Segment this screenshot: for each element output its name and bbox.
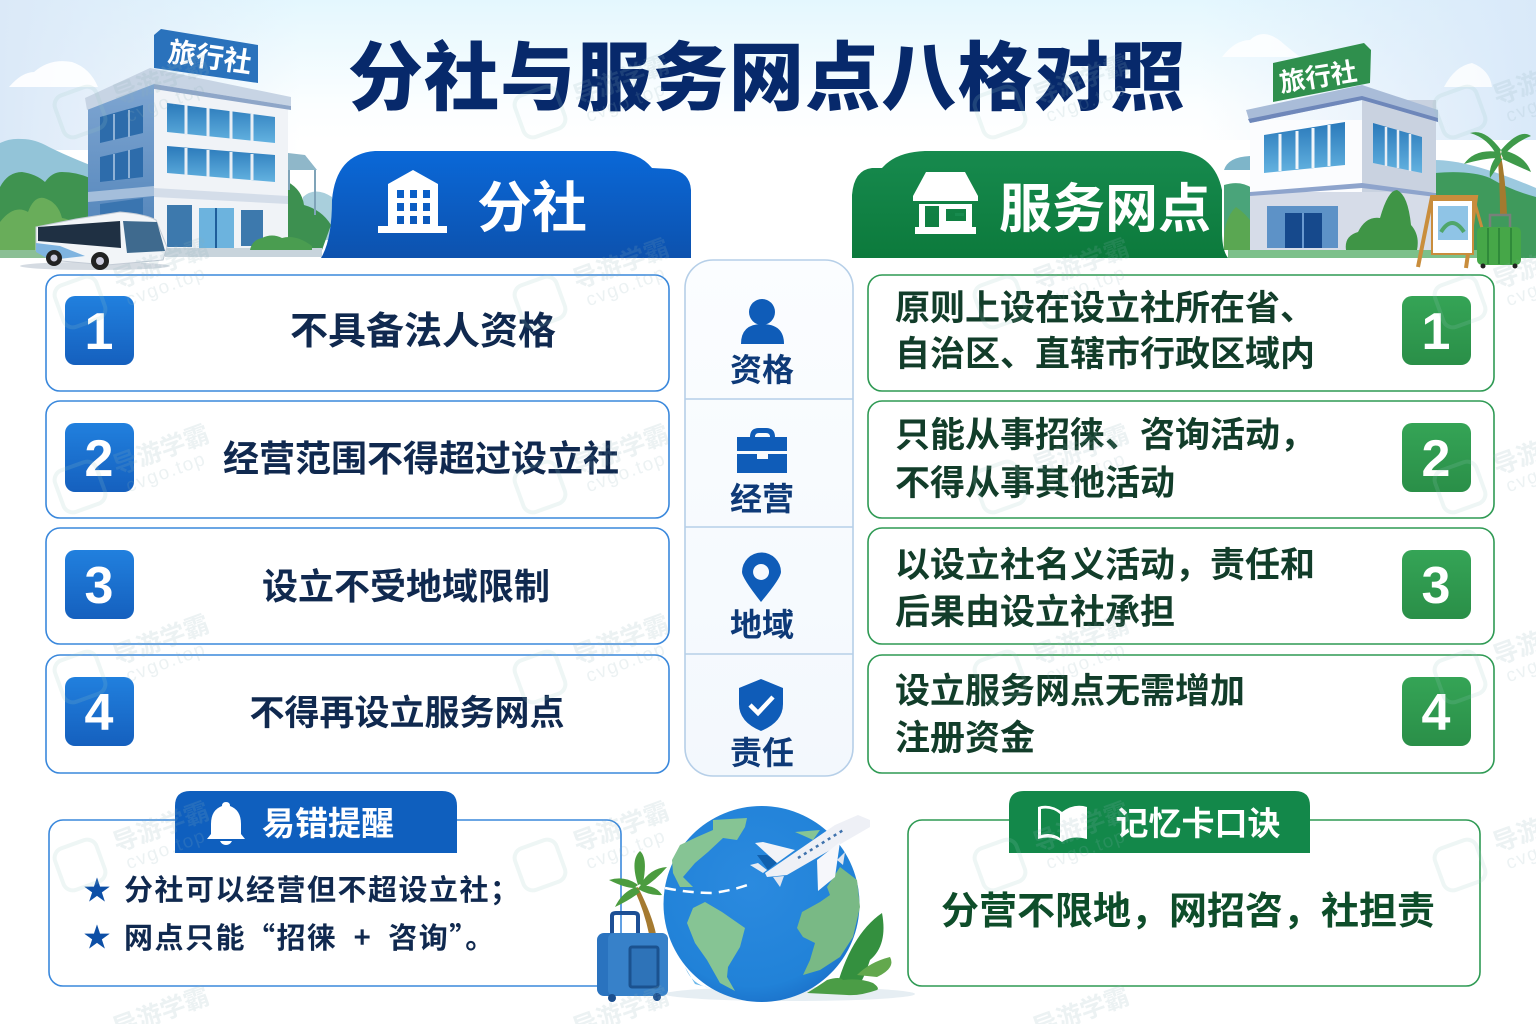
panel header: 分社 [321, 151, 691, 258]
badge 3 [65, 550, 134, 619]
label: 地域: 地域 [730, 607, 794, 643]
sign: 旅行社 blue [154, 29, 258, 83]
text: activity rule [895, 407, 1315, 506]
label: 记忆卡口诀 [1116, 797, 1280, 845]
text: location rule: 自治区、直辖市行政区域内 [895, 326, 1315, 377]
panel: memory tip [908, 791, 1480, 986]
watermark: repeating brand marks: cvgo.top [583, 263, 669, 311]
watermark: repeating brand marks: cvgo.top [583, 826, 669, 874]
left scene: hills and trees [0, 139, 332, 258]
text: activity rule: 不得从事其他活动 [895, 455, 1175, 506]
badge 3: 3 [85, 557, 113, 615]
bus [20, 212, 170, 270]
badge 2 [1402, 423, 1471, 492]
badge 4 [65, 677, 134, 746]
globe [664, 806, 860, 1002]
watermark: repeating brand marks: 导游学霸 [569, 797, 673, 858]
watermark: repeating brand marks: 导游学霸 [109, 50, 213, 111]
badge 1: 1 [1422, 303, 1450, 361]
right card 3 [868, 528, 1494, 644]
watermark: repeating brand marks: cvgo.top [123, 826, 209, 874]
watermark: repeating brand marks: cvgo.top [123, 263, 209, 311]
text line 2: 网点只能“招徕 + 咨询”。 [124, 915, 496, 957]
watermark: repeating brand marks: 导游学霸 [1029, 610, 1133, 671]
watermark: repeating brand marks: 导游学霸 [569, 234, 673, 295]
watermark: repeating brand marks: 导游学霸 [109, 234, 213, 295]
right card 2 [868, 401, 1494, 518]
left card 4 [46, 655, 669, 773]
watermark: repeating brand marks: 导游学霸 [569, 420, 673, 481]
right card 1 [868, 275, 1494, 391]
watermark: repeating brand marks: 导游学霸 [1029, 50, 1133, 111]
leaves [807, 913, 891, 995]
sign: 旅行社 green: 旅行社 [1277, 56, 1359, 98]
mnemonic text: 分营不限地，网招咨，社担责 [941, 880, 1435, 935]
watermark: repeating brand marks: 导游学霸 [109, 610, 213, 671]
green suitcase [1477, 215, 1521, 268]
icon: map pin [742, 552, 781, 602]
star 1: ★ [84, 876, 110, 906]
suitcase [597, 913, 668, 1002]
watermark: repeating brand marks: cvgo.top [1043, 449, 1129, 497]
watermark: repeating brand marks: cvgo.top [123, 639, 209, 687]
palm tree right [1464, 132, 1531, 215]
watermark: repeating brand marks: cvgo.top [1043, 639, 1129, 687]
text: region: 设立不受地域限制 [262, 566, 550, 607]
watermark: repeating brand marks: 导游学霸 [1029, 420, 1133, 481]
sign: 旅行社 blue: 旅行社 [166, 36, 254, 79]
icon: open book [1038, 806, 1087, 842]
text: activity rule: 只能从事招徕、咨询活动， [895, 407, 1315, 458]
badge 1: 1 [85, 303, 113, 361]
panel header: 服务网点 [852, 151, 1228, 258]
flight path [665, 883, 753, 893]
text: liability rule: 后果由设立社承担 [895, 584, 1175, 635]
label: 易错提醒 [262, 797, 394, 845]
watermark: repeating brand marks: 导游学霸 [569, 610, 673, 671]
watermark: repeating brand marks: cvgo.top [1043, 263, 1129, 311]
watermark: repeating brand marks: cvgo.top [583, 639, 669, 687]
left card 3 [46, 528, 669, 644]
label: 资格: 资格 [730, 352, 794, 388]
text: location rule [895, 280, 1315, 377]
bushes [1346, 190, 1418, 250]
watermark: repeating brand marks: cvgo.top [123, 449, 209, 497]
light rim [685, 967, 710, 988]
badge 1 [65, 296, 134, 365]
icon: storefront [913, 172, 978, 234]
watermark: repeating brand marks: cvgo.top [123, 79, 209, 127]
illustration: globe, plane, suitcase [597, 806, 915, 1002]
watermark: repeating brand marks: cvgo.top [583, 79, 669, 127]
text: location rule: 原则上设在设立社所在省、 [895, 280, 1315, 331]
watermark: repeating brand marks: cvgo.top [1043, 79, 1129, 127]
land [672, 818, 860, 991]
tab: 易错提醒 [175, 791, 457, 853]
title: 分社与服务网点八格对照 [348, 17, 1186, 126]
heading: 服务网点: 服务网点 [999, 167, 1211, 243]
watermark: repeating brand marks: 导游学霸 [1029, 234, 1133, 295]
watermark: repeating brand marks: cvgo.top [1043, 826, 1129, 874]
tab: 记忆卡口诀 [1009, 791, 1310, 853]
badge 1 [1402, 296, 1471, 365]
watermark: repeating brand marks: 导游学霸 [569, 50, 673, 111]
shadow [665, 987, 915, 1001]
badge 2 [65, 423, 134, 492]
watermark: repeating brand marks: cvgo.top [583, 449, 669, 497]
palm [609, 851, 667, 934]
icon: person [741, 299, 784, 344]
text: liability rule: 以设立社名义活动，责任和 [895, 537, 1315, 588]
label: 经营: 经营 [730, 481, 794, 517]
easel map board [1418, 197, 1482, 268]
right card 4 [868, 655, 1494, 773]
center column [685, 260, 853, 776]
badge 4: 4 [85, 684, 114, 742]
badge 2: 2 [1422, 430, 1450, 488]
left building: branch office [85, 68, 322, 257]
left card 2 [46, 401, 669, 518]
icon: office building [378, 170, 447, 233]
badge 4 [1402, 677, 1471, 746]
heading: 分社: 分社 [477, 163, 587, 243]
text: responsibility: 不得再设立服务网点 [249, 694, 565, 733]
badge 4: 4 [1422, 684, 1451, 742]
badge 3: 3 [1422, 557, 1450, 615]
text: liability rule [895, 537, 1315, 635]
text: qualification: 不具备法人资格 [290, 311, 556, 353]
badge 3 [1402, 550, 1471, 619]
label: 责任: 责任 [730, 735, 794, 771]
right scene: hills and trees [1224, 156, 1536, 258]
icon: bell [207, 802, 245, 845]
star 2: ★ [84, 923, 110, 953]
watermark: repeating brand marks: 导游学霸 [109, 420, 213, 481]
text: capital rule [895, 663, 1245, 761]
text: capital rule: 注册资金 [895, 710, 1035, 761]
sign: 旅行社 green [1273, 43, 1371, 102]
text line 1: 分社可以经营但不超设立社； [124, 867, 521, 909]
icon: briefcase [737, 428, 787, 473]
text: capital rule: 设立服务网点无需增加 [895, 663, 1245, 714]
badge 2: 2 [85, 430, 113, 488]
panel: common mistakes [49, 791, 621, 986]
text: business scope: 经营范围不得超过设立社 [223, 438, 619, 479]
watermark: repeating brand marks: 导游学霸 [109, 797, 213, 858]
left card 1 [46, 275, 669, 391]
plane [750, 815, 870, 891]
right building: service outlet [1246, 85, 1438, 250]
icon: shield check [739, 679, 783, 731]
watermark: repeating brand marks: 导游学霸 [1029, 797, 1133, 858]
